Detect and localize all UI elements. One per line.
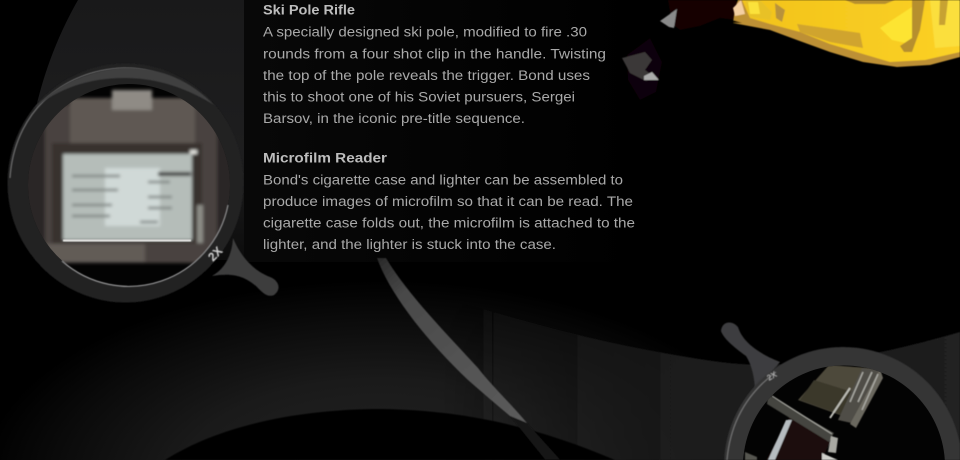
magnifier: microfilm reader bbox=[8, 64, 279, 302]
body line: lighter, and the lighter is stuck into the case. bbox=[263, 237, 556, 252]
text block: ski pole rifle bbox=[263, 2, 606, 126]
illustration: dark figure fragments bbox=[622, 0, 745, 100]
body line: produce images of microfilm so that it can be read. The bbox=[263, 194, 633, 209]
magnifier ring bbox=[724, 347, 960, 460]
illustration: yellow shape bbox=[733, 0, 960, 67]
magnifier ring bbox=[8, 64, 244, 302]
magnifier: cigarette case bbox=[721, 322, 960, 460]
icon: gray shard bbox=[660, 9, 677, 28]
magnifier label: 2X bbox=[766, 370, 779, 383]
lens photo bbox=[22, 90, 237, 263]
ribbon bbox=[377, 258, 560, 460]
lens highlight bbox=[62, 205, 228, 286]
heading: microfilm reader: Microfilm Reader bbox=[263, 150, 388, 166]
body line: A specially designed ski pole, modified to fire .30 bbox=[263, 24, 587, 40]
body line: this to shoot one of his Soviet pursuers, Sergei bbox=[263, 90, 575, 104]
body line: Bond's cigarette case and lighter can be assembled to bbox=[263, 172, 623, 188]
magnifier handle bbox=[212, 238, 279, 296]
magnifier handle bbox=[721, 322, 780, 392]
body line: Barsov, in the iconic pre-title sequence. bbox=[263, 111, 525, 126]
icon: light shard bbox=[644, 72, 659, 80]
body line: rounds from a four shot clip in the handle. Twisting bbox=[263, 46, 606, 62]
lens photo bbox=[745, 365, 883, 460]
body line: cigarette case folds out, the microfilm is attached to the bbox=[263, 216, 635, 230]
text block: microfilm reader bbox=[263, 150, 635, 252]
magnifier label: 2X bbox=[205, 244, 226, 264]
body line: the top of the pole reveals the trigger. Bond uses bbox=[263, 68, 590, 83]
icon: gray shard bbox=[622, 52, 656, 81]
heading: ski pole rifle: Ski Pole Rifle bbox=[263, 2, 356, 18]
